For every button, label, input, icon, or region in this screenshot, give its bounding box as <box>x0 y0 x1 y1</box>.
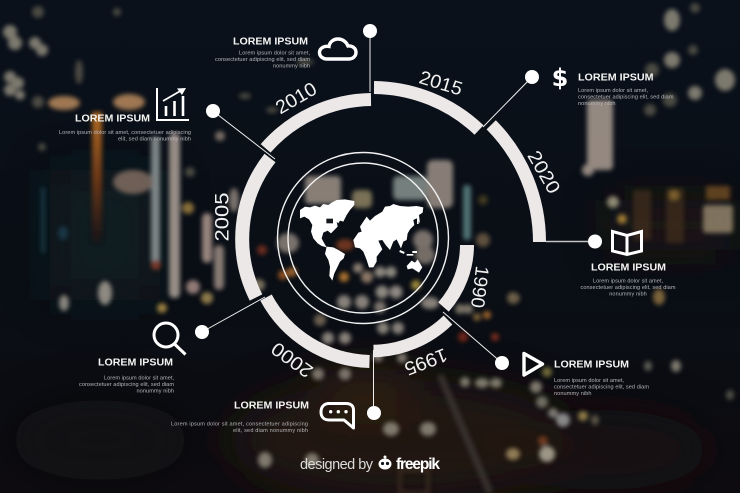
centre globe rings and world map <box>278 152 448 324</box>
panel: dollar (upper right) <box>552 64 674 107</box>
panel: play (lower right) <box>524 354 649 397</box>
heading: LOREM IPSUM <box>578 71 654 83</box>
body text: Lorem ipsum dolor sit amet, <box>593 279 663 285</box>
panel: search (lower left) <box>79 323 186 394</box>
icon: play triangle <box>524 354 542 375</box>
body text: consectetuer adipiscing elit, sed diam <box>554 384 649 390</box>
dot: right <box>588 234 602 248</box>
body text: consectetuer adipiscing elit, sed diam <box>580 285 676 291</box>
icon: open book <box>612 232 642 254</box>
body text: Lorem ipsum dolor sit amet, consectetuer adipiscing <box>59 130 191 136</box>
body text: elit, sed diam nonummy nibh <box>233 428 308 434</box>
timeline ring <box>195 24 602 420</box>
heading: LOREM IPSUM <box>234 400 309 412</box>
icon: rising bar chart <box>157 88 189 120</box>
dot: lower left <box>195 325 209 339</box>
arc 2010 <box>266 100 371 148</box>
body text <box>171 421 308 434</box>
body text: consectetuer adipiscing elit, sed diam <box>578 94 674 100</box>
body text <box>554 378 649 397</box>
year 2015: 2015 <box>417 67 465 100</box>
arc 1995 <box>374 320 448 351</box>
body text: Lorem ipsum dolor sit amet, <box>104 375 174 381</box>
body text: Lorem ipsum dolor sit amet, consectetuer adipiscing <box>171 421 308 427</box>
body text: elit, sed diam nonummy nibh <box>118 136 191 142</box>
body text: nonummy nibh <box>554 391 592 397</box>
body text <box>59 130 191 142</box>
panel: chat (bottom) <box>171 400 354 434</box>
icon: freepik mascot <box>378 456 392 470</box>
body text <box>215 50 310 70</box>
year 1995: 1995 <box>401 343 450 379</box>
heading: LOREM IPSUM <box>233 36 308 48</box>
arc 2015 <box>374 88 479 130</box>
year labels <box>212 67 564 381</box>
arc 2005 <box>242 158 270 298</box>
icon: speech bubble <box>321 404 354 428</box>
body text <box>79 375 174 394</box>
dot: upper left <box>206 104 220 118</box>
body text: nonummy nibh <box>136 388 174 394</box>
designed by text: designed by <box>300 457 374 473</box>
year 1990: 1990 <box>466 265 492 309</box>
heading: LOREM IPSUM <box>75 113 150 125</box>
freepik wordmark: freepik <box>396 456 440 473</box>
panel: book (right) <box>580 232 676 298</box>
icon: dollar sign: $ <box>552 64 568 92</box>
arc 1990 <box>444 245 467 307</box>
icon: magnifying glass <box>154 323 186 354</box>
body text: nonummy nibh <box>578 101 616 107</box>
heading: LOREM IPSUM <box>591 262 666 274</box>
world map <box>300 199 423 281</box>
dot: top <box>363 24 377 38</box>
icon: cloud <box>320 39 356 59</box>
dot: upper right <box>525 70 539 84</box>
heading: LOREM IPSUM <box>98 357 173 369</box>
footer credit <box>300 456 440 473</box>
body text: nonummy nibh <box>609 292 647 298</box>
body text: nonummy nibh <box>273 64 310 70</box>
dot: lower right <box>495 356 509 370</box>
body text <box>578 88 674 107</box>
body text: Lorem ipsum dolor sit amet, <box>554 378 624 384</box>
arc 2000 <box>266 298 370 362</box>
inner ring <box>288 163 438 313</box>
year 2020: 2020 <box>523 147 564 198</box>
outer ring <box>278 152 448 324</box>
body text <box>580 279 676 298</box>
body text: consectetuer adipiscing elit, sed diam <box>215 57 310 63</box>
body text: Lorem ipsum dolor sit amet, <box>239 50 310 56</box>
panel: chart (upper left) <box>59 88 191 142</box>
panel: cloud (top) <box>215 36 356 70</box>
body text: Lorem ipsum dolor sit amet, <box>578 88 648 94</box>
year 2010: 2010 <box>272 79 321 119</box>
year 2005: 2005 <box>212 192 234 242</box>
heading: LOREM IPSUM <box>554 358 629 370</box>
connector lines <box>202 31 595 413</box>
body text: consectetuer adipiscing elit, sed diam <box>79 382 174 388</box>
arc 2020 <box>491 125 540 242</box>
dot: bottom <box>367 406 381 420</box>
year 2000: 2000 <box>268 337 317 381</box>
